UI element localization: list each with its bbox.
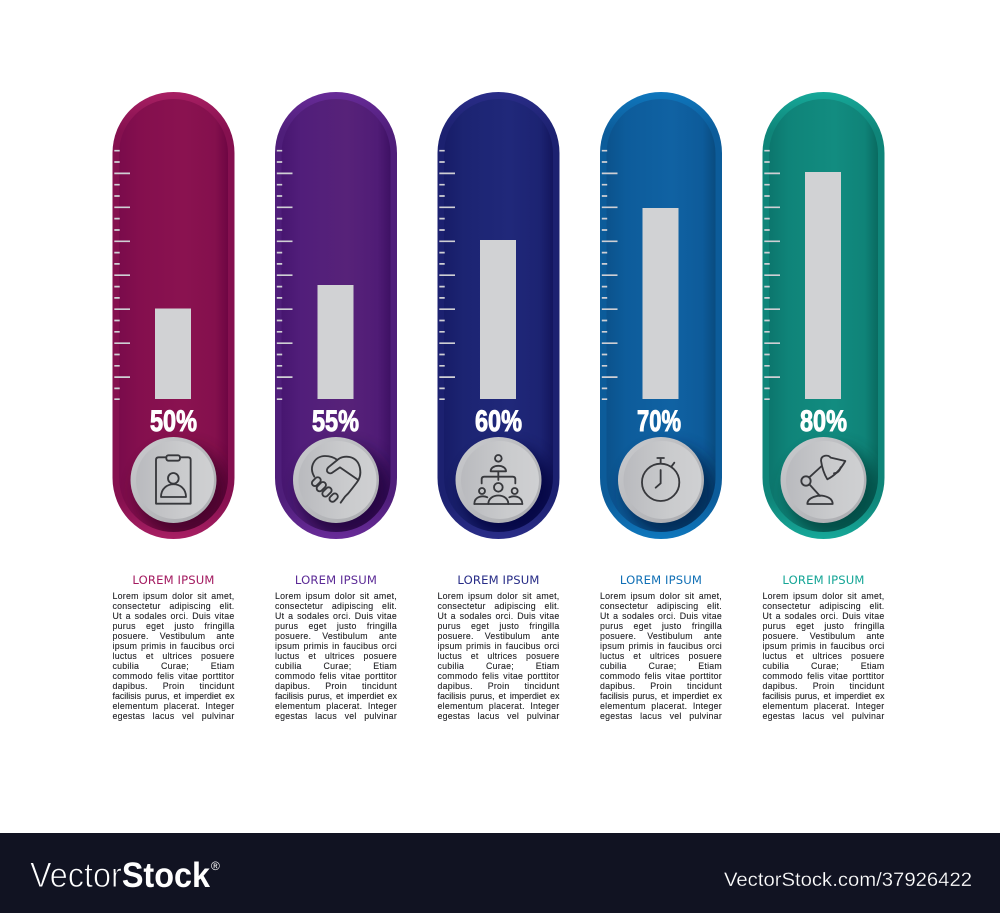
footer url: VectorStock.com/37926422 (724, 870, 972, 891)
text block: column 3: elementum placerat. Integer (438, 701, 560, 711)
text block: column 1: consectetur adipiscing elit. (112, 601, 234, 611)
text block: column 5: posuere. Vestibulum ante (762, 631, 884, 641)
panel: 60% thermometer (438, 92, 560, 539)
text block: column 5 (762, 591, 884, 721)
text block: column 4 (600, 591, 722, 721)
percentage: 60%: 60% (475, 405, 522, 438)
panel: 80% thermometer (762, 92, 884, 539)
heading: column 3: LOREM IPSUM (457, 573, 540, 587)
text block: column 5: ipsum primis in faucibus orci (762, 641, 884, 651)
text block: column 1: Lorem ipsum dolor sit amet, (112, 591, 234, 601)
text block: column 3 (438, 591, 560, 721)
text block: column 3: consectetur adipiscing elit. (438, 601, 560, 611)
text block: column 4: consectetur adipiscing elit. (600, 601, 722, 611)
text block: column 3: luctus et ultrices posuere (438, 651, 560, 661)
text block: column 4: cubilia Curae; Etiam (600, 661, 722, 671)
text block: column 2: Ut a sodales orci. Duis vitae (275, 611, 397, 621)
text block: column 1: cubilia Curae; Etiam (112, 661, 234, 671)
text block: column 1: commodo felis vitae porttitor (112, 671, 234, 681)
text block: column 3: facilisis purus, et imperdiet ex (438, 691, 560, 701)
text block: column 3: egestas lacus vel pulvinar (438, 711, 560, 721)
text block: column 4: luctus et ultrices posuere (600, 651, 722, 661)
text block: column 4: purus eget justo fringilla (600, 621, 722, 631)
text block: column 1: elementum placerat. Integer (112, 701, 234, 711)
panel: 55% thermometer (275, 92, 397, 539)
heading: column 4: LOREM IPSUM (620, 573, 702, 587)
text block: column 1: facilisis purus, et imperdiet ex (112, 691, 234, 701)
heading: column 5: LOREM IPSUM (782, 573, 865, 587)
icon: id badge (156, 455, 191, 504)
panel: 50% thermometer (112, 92, 234, 539)
text block: column 5: Ut a sodales orci. Duis vitae (762, 611, 884, 621)
panel: 70% thermometer (600, 92, 722, 539)
text block: column 2: elementum placerat. Integer (275, 701, 397, 711)
text block: column 4: posuere. Vestibulum ante (600, 631, 722, 641)
text block: column 4: elementum placerat. Integer (600, 701, 722, 711)
text block: column 4: Ut a sodales orci. Duis vitae (600, 611, 722, 621)
text block: column 5: purus eget justo fringilla (762, 621, 884, 631)
text block: column 1: Ut a sodales orci. Duis vitae (112, 611, 234, 621)
footer bar (0, 833, 1000, 913)
text block: column 2: dapibus. Proin tincidunt (275, 681, 397, 691)
text block: column 2: purus eget justo fringilla (275, 621, 397, 631)
percentage: 55%: 55% (312, 405, 359, 438)
text block: column 1: posuere. Vestibulum ante (112, 631, 234, 641)
text block: column 4: Lorem ipsum dolor sit amet, (600, 591, 722, 601)
text block: column 4: egestas lacus vel pulvinar (600, 711, 722, 721)
text block: column 3: purus eget justo fringilla (438, 621, 560, 631)
text block: column 1: purus eget justo fringilla (112, 621, 234, 631)
text block: column 4: facilisis purus, et imperdiet ex (600, 691, 722, 701)
registered mark: ® (211, 859, 220, 873)
text block: column 2: facilisis purus, et imperdiet ex (275, 691, 397, 701)
text block: column 3: cubilia Curae; Etiam (438, 661, 560, 671)
text block: column 2: Lorem ipsum dolor sit amet, (275, 591, 397, 601)
text block: column 1: ipsum primis in faucibus orci (112, 641, 234, 651)
text block: column 1 (112, 591, 234, 721)
footer logo: VectorStock (30, 856, 210, 895)
heading: column 1: LOREM IPSUM (132, 573, 215, 587)
text block: column 5: luctus et ultrices posuere (762, 651, 884, 661)
text block: column 2: posuere. Vestibulum ante (275, 631, 397, 641)
text block: column 3: posuere. Vestibulum ante (438, 631, 560, 641)
text block: column 3: dapibus. Proin tincidunt (438, 681, 560, 691)
text block: column 4: commodo felis vitae porttitor (600, 671, 722, 681)
text block: column 5: elementum placerat. Integer (762, 701, 884, 711)
text block: column 2: luctus et ultrices posuere (275, 651, 397, 661)
text block: column 1: dapibus. Proin tincidunt (112, 681, 234, 691)
text block: column 3: Ut a sodales orci. Duis vitae (438, 611, 560, 621)
text block: column 5: facilisis purus, et imperdiet ex (762, 691, 884, 701)
text block: column 1: egestas lacus vel pulvinar (112, 711, 234, 721)
heading: column 2: LOREM IPSUM (295, 573, 377, 587)
text block: column 3: ipsum primis in faucibus orci (438, 641, 560, 651)
text block: column 5: commodo felis vitae porttitor (762, 671, 884, 681)
text block: column 5: consectetur adipiscing elit. (762, 601, 884, 611)
icon: stopwatch (642, 458, 679, 501)
percentage: 70%: 70% (637, 405, 681, 438)
icon: desk lamp (801, 456, 845, 504)
text block: column 2: ipsum primis in faucibus orci (275, 641, 397, 651)
text block: column 3: Lorem ipsum dolor sit amet, (438, 591, 560, 601)
percentage: 50%: 50% (150, 405, 197, 438)
text block: column 4: dapibus. Proin tincidunt (600, 681, 722, 691)
text block: column 2: consectetur adipiscing elit. (275, 601, 397, 611)
text block: column 2: cubilia Curae; Etiam (275, 661, 397, 671)
text block: column 4: ipsum primis in faucibus orci (600, 641, 722, 651)
text block: column 5: dapibus. Proin tincidunt (762, 681, 884, 691)
text block: column 2: commodo felis vitae porttitor (275, 671, 397, 681)
text block: column 5: Lorem ipsum dolor sit amet, (762, 591, 884, 601)
icon: team hierarchy (474, 455, 522, 504)
text block: column 3: commodo felis vitae porttitor (438, 671, 560, 681)
text block: column 2: egestas lacus vel pulvinar (275, 711, 397, 721)
text block: column 2 (275, 591, 397, 721)
icon: handshake (311, 456, 360, 503)
percentage: 80%: 80% (800, 405, 847, 438)
text block: column 5: egestas lacus vel pulvinar (762, 711, 884, 721)
text block: column 1: luctus et ultrices posuere (112, 651, 234, 661)
text block: column 5: cubilia Curae; Etiam (762, 661, 884, 671)
